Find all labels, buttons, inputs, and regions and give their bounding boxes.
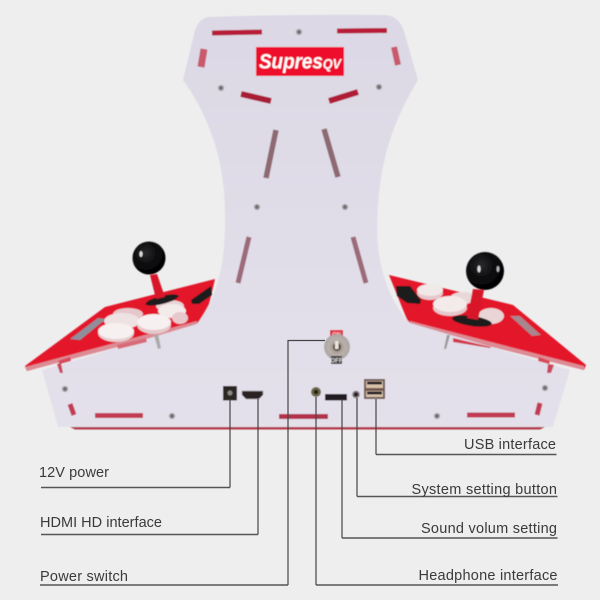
right action buttons <box>417 284 504 324</box>
left joystick <box>132 242 179 308</box>
slots in back panel <box>70 30 540 416</box>
callout: HDMI HD interface: HDMI HD interface <box>40 515 162 531</box>
screws <box>62 30 548 418</box>
USB ports <box>364 379 385 399</box>
callout: USB interface: USB interface <box>464 437 556 453</box>
white back panel <box>42 15 570 427</box>
HDMI port <box>242 391 263 399</box>
left action buttons <box>98 300 188 342</box>
left black side buttons <box>191 286 212 304</box>
power switch: OFF <box>330 358 343 364</box>
headphone jack <box>311 387 321 397</box>
right black side buttons <box>396 286 421 304</box>
front panel tabs <box>57 334 554 373</box>
callout: Headphone interface: Headphone interface <box>418 568 558 584</box>
red edge under base <box>70 427 545 430</box>
sound setting slot <box>325 394 347 400</box>
logo: SupresQV <box>259 50 342 74</box>
callout: Power switch <box>40 340 325 585</box>
left panel grey plate <box>70 318 106 340</box>
left control panel <box>25 242 215 371</box>
system button <box>352 391 360 398</box>
12V power jack <box>223 386 237 400</box>
callout: Power switch: Power switch <box>40 569 128 585</box>
right panel grey plate <box>510 316 541 336</box>
right joystick <box>451 252 504 329</box>
callout: Sound volum setting: Sound volum setting <box>421 521 557 537</box>
arcade machine <box>25 15 586 430</box>
power switch: ON <box>332 332 341 338</box>
callout: 12V power: 12V power <box>39 465 109 481</box>
callout: System setting button: System setting button <box>412 482 557 498</box>
right control panel <box>389 252 586 370</box>
power switch <box>324 330 350 364</box>
